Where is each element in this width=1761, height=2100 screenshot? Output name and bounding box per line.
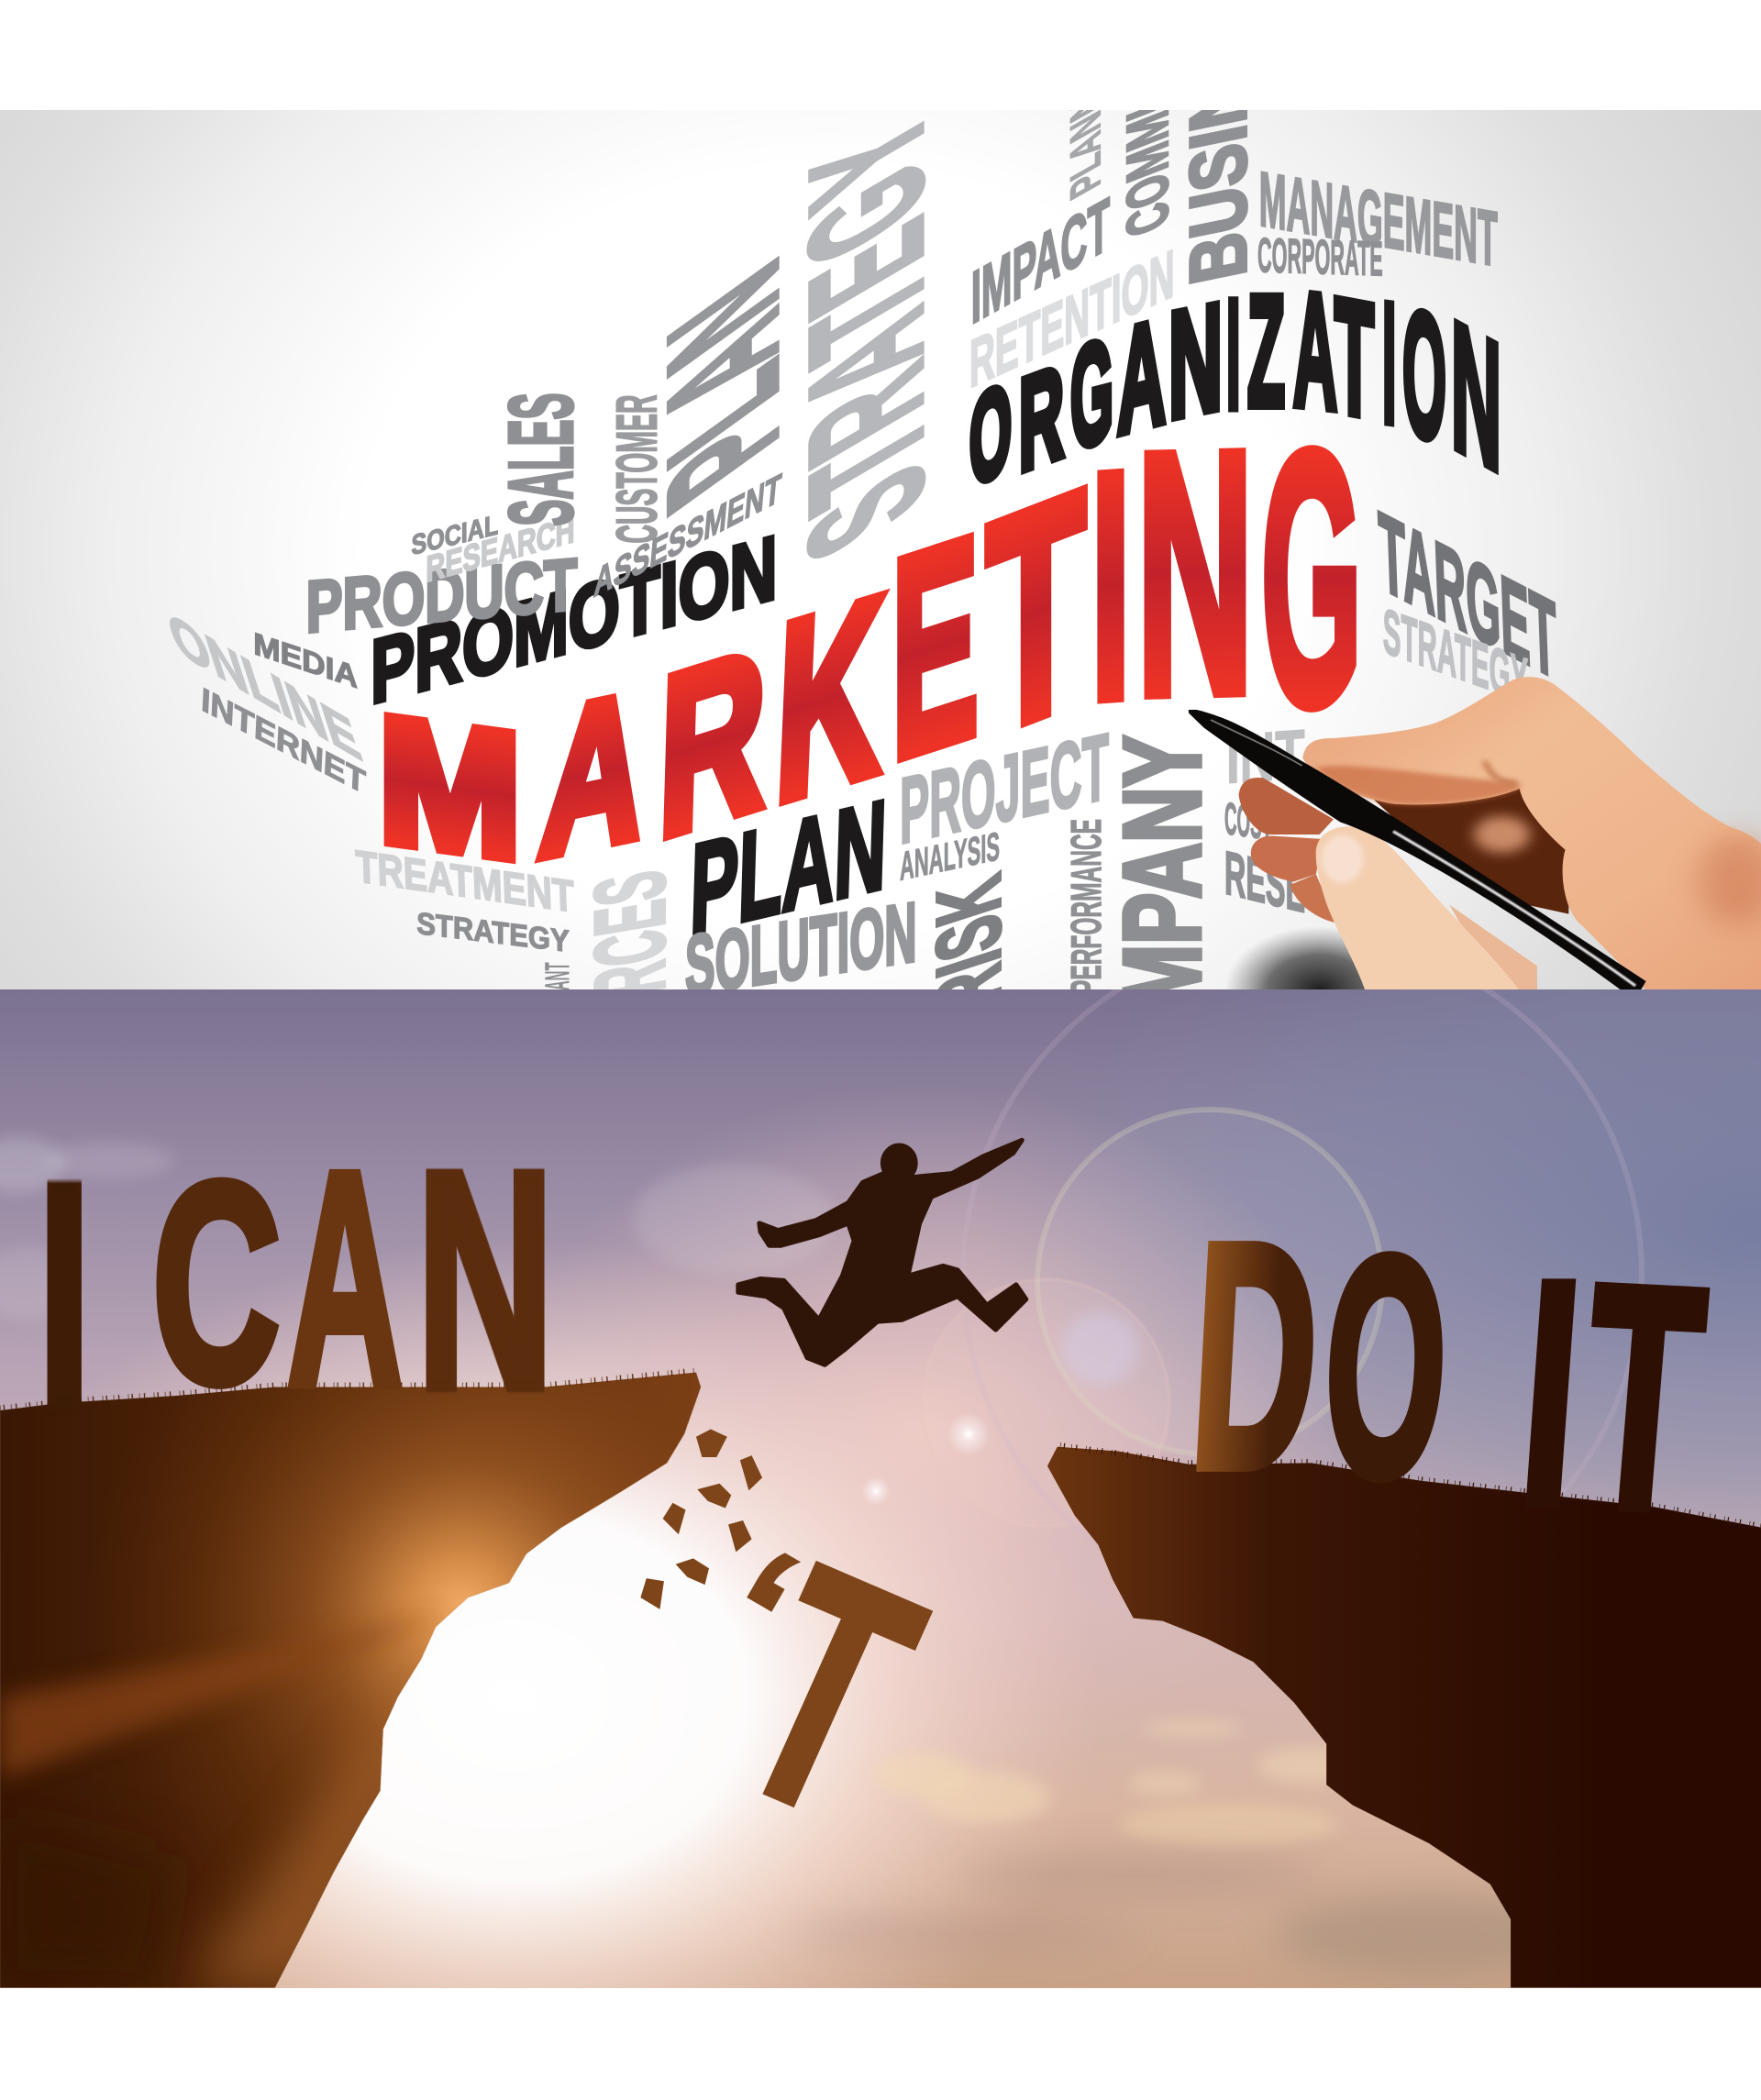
word: ORGANIZATION: N: [1451, 282, 1501, 511]
word: ORGANIZATION: I: [1382, 267, 1396, 459]
panel: marketing word cloud: [0, 110, 1761, 989]
shadow below hand: [1224, 926, 1414, 1055]
panel: I can do it scene: [0, 844, 1761, 2100]
lens spot small: [861, 1476, 891, 1506]
word: SALES: SALES: [490, 392, 592, 526]
palm and index finger: [1302, 677, 1761, 990]
word: ORGANIZATION: G: [1070, 310, 1113, 480]
word: ORGANIZATION: [969, 258, 1501, 514]
word: PLAN black: PLAN: [689, 773, 889, 960]
lens flare rings: [922, 935, 1642, 1614]
pen: [1189, 710, 1646, 990]
word: MARKETING: G: [1261, 377, 1362, 779]
word: MEDIA: MEDIA: [253, 626, 358, 695]
pen highlight: [1393, 832, 1635, 986]
lens spot lavender: [1062, 1311, 1139, 1385]
word: SOCIAL: SOCIAL: [411, 508, 498, 561]
word: STRATEGY small: STRATEGY: [416, 905, 570, 959]
sun glow: [0, 1238, 1101, 2100]
letter I: I: [1512, 1216, 1590, 1573]
light ray lower: [187, 1627, 450, 1988]
letter I: I: [38, 1117, 91, 1472]
body and limbs: [738, 1140, 1026, 1365]
word: SOLUTION: SOLUTION: [685, 886, 917, 1014]
letter N: N: [416, 1107, 554, 1453]
word: RETENTION: RETENTION: [969, 235, 1175, 403]
word: ONLINE: ONLINE: [160, 598, 368, 774]
word: BUSINESS: BUSIN: [1174, 72, 1263, 290]
word: TREATMENT: TREATMENT: [355, 842, 575, 923]
word: CORPORATE: CORPORATE: [1257, 229, 1383, 287]
word: ASSESSMENT: ASSESSMENT: [593, 465, 783, 607]
word: PLAN vertical: PLAN: [636, 230, 810, 545]
word: MANAGEMENT: MANAGEMENT: [1259, 156, 1498, 283]
word: ORGANIZATION: A: [1117, 289, 1166, 466]
falling letter T: T: [692, 1498, 961, 1888]
dark cloud bands: [789, 1857, 1587, 1976]
word: INT: INT: [1226, 716, 1305, 799]
right cliff: [1047, 1178, 1761, 1988]
word: ORGANIZATION: A: [1293, 258, 1337, 444]
letter A: A: [287, 1109, 403, 1448]
word: COST: COST: [1224, 793, 1272, 850]
falling rocks: [640, 1429, 762, 1609]
word: MARKETING: E: [892, 477, 979, 820]
word: ORGANIZATION: O: [1402, 270, 1446, 481]
word: RESEARCH: RESEARCH: [426, 509, 574, 591]
lens spot large: [947, 1412, 991, 1456]
lower palm under pen: [1449, 905, 1537, 990]
head: [882, 1145, 915, 1180]
word: MARKETING: A: [534, 648, 655, 901]
hand holding pen: [1189, 677, 1761, 1055]
word: STRATEGY large: STRATEGY: [777, 83, 957, 591]
thumb: [1316, 826, 1520, 990]
word: PLANNING: PLANNING: [1062, 31, 1110, 207]
word: MARKETING: T: [986, 427, 1086, 801]
word: MARKETING: M: [379, 680, 521, 897]
word: STRATEGY under target: STRATEGY: [1383, 593, 1528, 717]
grass on right cliff: [1060, 1445, 1761, 1526]
pink glow: [504, 1082, 1348, 1779]
word: ORGANIZATION: I: [1226, 269, 1240, 441]
index finger shading: [1316, 766, 1520, 805]
grass on left cliff: [0, 1371, 696, 1408]
dark inside of the palm: [1368, 782, 1568, 914]
word: RCES: RCES: [574, 864, 686, 1006]
word: ORGANIZATION: Z: [1247, 262, 1285, 439]
lit patch inside the palm: [1474, 816, 1530, 853]
dark corner lower left: [0, 1814, 175, 1988]
paper background: [0, 110, 1761, 989]
word: TARGET: TARGET: [1377, 489, 1558, 704]
word: INTERNET: INTERNET: [200, 681, 367, 802]
sky: [0, 989, 1761, 1988]
word: PROMOTION: PROMOTION: [371, 517, 777, 724]
word: MARKETING: K: [771, 543, 888, 857]
word: ANALYSIS: ANALYSIS: [900, 823, 1000, 890]
letter T: T: [1572, 1219, 1714, 1577]
cliff sun glow and rays: [0, 1334, 760, 2036]
middle finger: [1239, 778, 1334, 834]
word: COMPANY: MPANY: [1102, 735, 1224, 1009]
letter D: D: [1184, 1178, 1326, 1535]
clouds: [0, 1137, 1367, 1845]
jumping person: [738, 1140, 1026, 1365]
letter C: C: [150, 1123, 282, 1442]
word group: centre of the cloud: [900, 258, 1501, 1026]
word: MARKETING: N: [1136, 381, 1254, 768]
radial glow: [0, 1334, 760, 2036]
word: MARKETING: I: [1091, 406, 1131, 767]
pen highlight near tip: [1211, 720, 1302, 766]
word: PERFORMANCE: PERFORMANCE: [1062, 819, 1110, 995]
knuckle fold: [1485, 761, 1516, 782]
cliff silhouette right: [1047, 1447, 1761, 1988]
little finger: [1290, 874, 1337, 923]
word: MARKETING: [379, 377, 1362, 901]
thumb nail: [1322, 835, 1363, 883]
light ray upper: [0, 1615, 450, 1779]
falling apostrophe: ‘: [671, 1503, 835, 1730]
blue tint on the right of the sky: [981, 844, 1761, 1614]
letter O: O: [1318, 1192, 1453, 1542]
cliff silhouette left: [0, 1373, 701, 1988]
wrist redness: [1699, 834, 1761, 926]
word: ORGANIZATION: T: [1335, 265, 1374, 452]
word: MARKETING: R: [656, 601, 769, 887]
left cliff: [0, 1107, 1026, 2036]
word group: left side of the cloud: [160, 83, 957, 1014]
word: CUSTOMER: CUSTOMER: [604, 395, 669, 544]
word: PRODUCT: PRODUCT: [306, 544, 578, 648]
ring finger: [1251, 835, 1323, 882]
word: ORGANIZATION: O: [969, 357, 1012, 514]
word group: right side of the cloud: [969, 31, 1558, 717]
word: ANT: ANT: [538, 962, 577, 990]
word: ORGANIZATION: N: [1168, 271, 1223, 450]
word: RESE: RESE: [1224, 839, 1305, 926]
word: COMMUNICATION: COMMUN: [1113, 49, 1180, 246]
word: IMPACT: IMPACT: [971, 182, 1110, 341]
word: PROJECT: PROJECT: [900, 713, 1109, 864]
word: RISK: RISK: [918, 865, 1019, 1026]
word: ORGANIZATION: R: [1019, 338, 1064, 500]
